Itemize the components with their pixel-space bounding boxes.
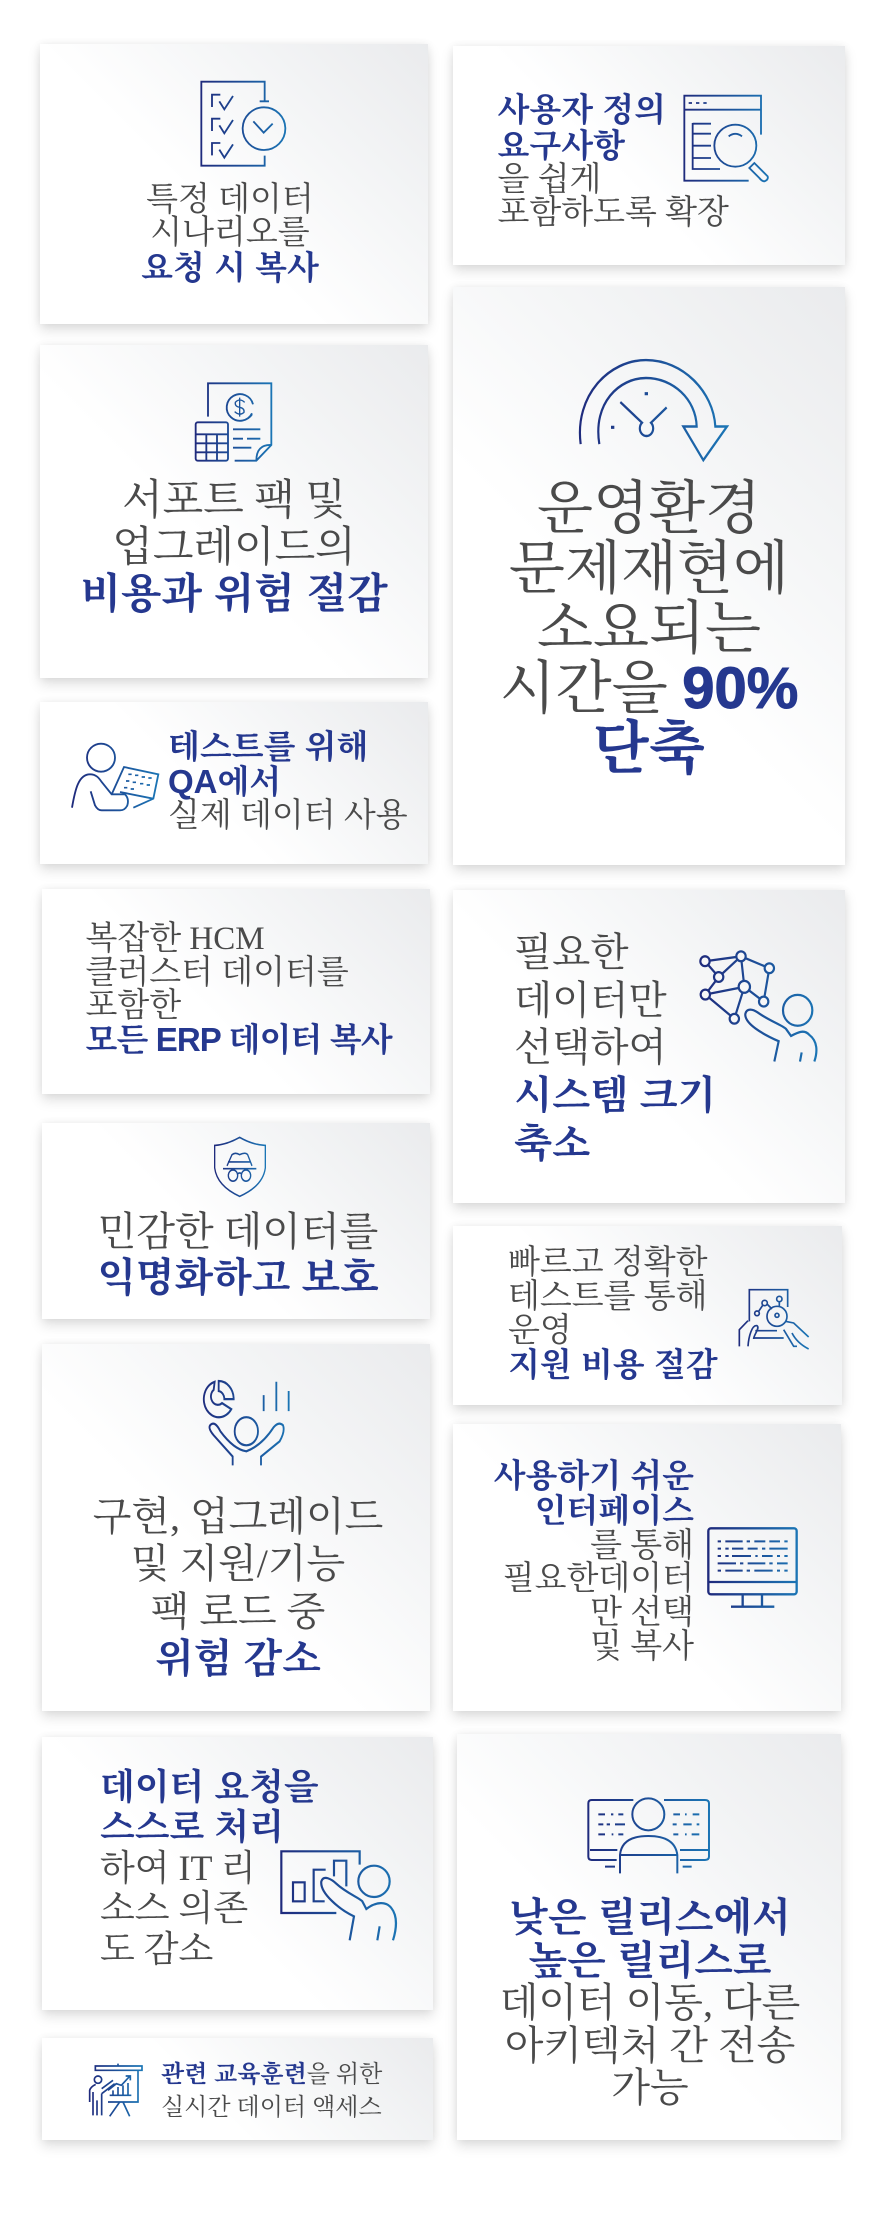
text: real data for QA: 실제 데이터 사용 (168, 798, 408, 834)
panel: anonymize and protect (42, 1123, 430, 1319)
text: self-service data requests (100, 1766, 319, 1969)
text: reduce support costs: 운영 (508, 1313, 572, 1349)
text: reduce system size: 축소 (514, 1122, 590, 1166)
icon: person between monitors (587, 1797, 710, 1874)
text: self-service data requests: 도 감소 (100, 1929, 213, 1969)
text: copy all ERP data (86, 920, 393, 1058)
text: copy all ERP data: 복잡한 HCM (86, 921, 265, 957)
text: move data between releases: 아키텍처 간 전송 (505, 2022, 795, 2068)
text: self-service data requests: 소스 의존 (100, 1888, 248, 1928)
panel: easy interface (453, 1424, 841, 1711)
text: reduce support costs (508, 1244, 718, 1383)
icon: clock with arrow (578, 358, 730, 462)
text: live data for training: 실시간 데이터 액세스 (161, 2095, 382, 2121)
text: live data for training (161, 2061, 382, 2121)
panel: copy all ERP data (42, 889, 430, 1094)
panel: copy scenarios on request (40, 44, 428, 324)
text: copy all ERP data: 포함한 (86, 988, 181, 1024)
text: copy scenarios: 특정 데이터 (146, 182, 314, 218)
panel: real data for QA (40, 702, 428, 864)
panel: reduce cost and risk (40, 345, 428, 678)
text: copy all ERP data: 모든 ERP 데이터 복사 (86, 1021, 392, 1058)
text: 90 percent headline: 시간을 90% (500, 656, 798, 721)
text: easy interface (494, 1457, 694, 1665)
icon: window with magnifier (683, 94, 769, 182)
text: easy interface: 필요한데이터 (503, 1561, 694, 1597)
text: reduce support costs: 빠르고 정확한 (508, 1245, 708, 1281)
icon: person with network (699, 950, 818, 1062)
text: anonymize and protect (97, 1209, 379, 1300)
text: live data for training: 관련 교육훈련을 위한 (161, 2061, 382, 2088)
icon: monitor with code (707, 1527, 798, 1608)
text: reduce cost and risk: 비용과 위험 절감 (80, 570, 388, 617)
icon: hands with tablet (738, 1288, 810, 1350)
text: reduce risk during implementation: 및 지원/기능 (131, 1541, 345, 1586)
text: move data between releases: 데이터 이동, 다른 (500, 1980, 800, 2025)
text: real data for QA: 테스트를 위해 (168, 728, 368, 765)
text: self-service data requests: 하여 IT 리 (100, 1848, 256, 1888)
text: custom requirements: 사용자 정의 (498, 91, 666, 128)
text: reduce system size: 필요한 (514, 931, 628, 975)
text: custom requirements (498, 91, 729, 231)
text: 90 percent headline (500, 476, 798, 781)
panel: move data between releases (457, 1734, 841, 2140)
panel: reduce support costs (453, 1226, 842, 1405)
text: easy interface: 및 복사 (590, 1629, 694, 1665)
panel: reduce reproduction time by 90% (453, 287, 845, 865)
text: move data between releases: 높은 릴리스로 (529, 1938, 771, 1982)
text: real data for QA: QA에서 (168, 763, 281, 800)
text: copy all ERP data: 클러스터 데이터를 (86, 955, 349, 991)
text: reduce system size (514, 931, 716, 1166)
panel: custom requirements (453, 46, 845, 265)
text: reduce system size: 시스템 크기 (514, 1074, 716, 1118)
text: reduce cost and risk: 업그레이드의 (112, 525, 356, 571)
text: easy interface: 사용하기 쉬운 (494, 1457, 694, 1494)
text: reduce risk during implementation: 구현, 업그레이드 (93, 1494, 383, 1538)
icon: person at chart board (280, 1850, 398, 1941)
text: move data between releases (500, 1896, 800, 2110)
text: reduce system size: 데이터만 (514, 979, 667, 1023)
panel: live data for training (42, 2038, 433, 2140)
text: custom requirements: 요구사항 (498, 127, 625, 164)
icon: person at laptop (71, 742, 160, 812)
text: anonymize and protect: 민감한 데이터를 (98, 1209, 378, 1254)
icon: invoice and calculator (194, 382, 272, 462)
text: custom requirements: 을 쉽게 (498, 162, 601, 198)
text: move data between releases: 낮은 릴리스에서 (509, 1896, 791, 1940)
text: real data for QA (168, 728, 408, 834)
panel: reduce risk during implementation (42, 1344, 430, 1711)
text: easy interface: 를 통해 (590, 1528, 694, 1564)
text: copy scenarios: 요청 시 복사 (141, 249, 319, 286)
text: self-service data requests: 데이터 요청을 (100, 1766, 319, 1807)
text: 90 percent headline: 소요되는 (537, 596, 761, 661)
text: reduce system size: 선택하여 (514, 1026, 667, 1070)
text: reduce risk during implementation: 팩 로드 중 (151, 1588, 325, 1634)
text: self-service data requests: 스스로 처리 (100, 1806, 284, 1847)
icon: presenter with chart (88, 2064, 143, 2117)
text: copy scenarios: 시나리오를 (150, 215, 310, 251)
text: reduce support costs: 지원 비용 절감 (508, 1346, 718, 1383)
text: reduce cost and risk (80, 478, 388, 617)
text: 90 percent headline: 운영환경 (537, 476, 761, 541)
icon: shield with spy (214, 1136, 266, 1198)
text: 90 percent headline: 문제재현에 (509, 536, 789, 601)
panel: reduce system size (453, 890, 845, 1203)
text: 90 percent headline: 단축 (593, 716, 705, 781)
text: easy interface: 인터페이스 (535, 1492, 694, 1529)
icon: checklist with clock (200, 80, 286, 167)
icon: person with charts (202, 1380, 290, 1466)
text: anonymize and protect: 익명화하고 보호 (97, 1256, 379, 1300)
text: copy scenarios (141, 182, 319, 286)
text: move data between releases: 가능 (611, 2065, 689, 2110)
text: reduce support costs: 테스트를 통해 (508, 1279, 708, 1315)
text: reduce cost and risk: 서포트 팩 및 (122, 478, 346, 524)
text: custom requirements: 포함하도록 확장 (498, 195, 729, 231)
text: reduce risk during implementation: 위험 감소 (155, 1637, 321, 1681)
panel: self-service data requests (42, 1737, 433, 2010)
text: easy interface: 만 선택 (590, 1595, 694, 1631)
text: reduce risk during implementation (93, 1494, 383, 1681)
